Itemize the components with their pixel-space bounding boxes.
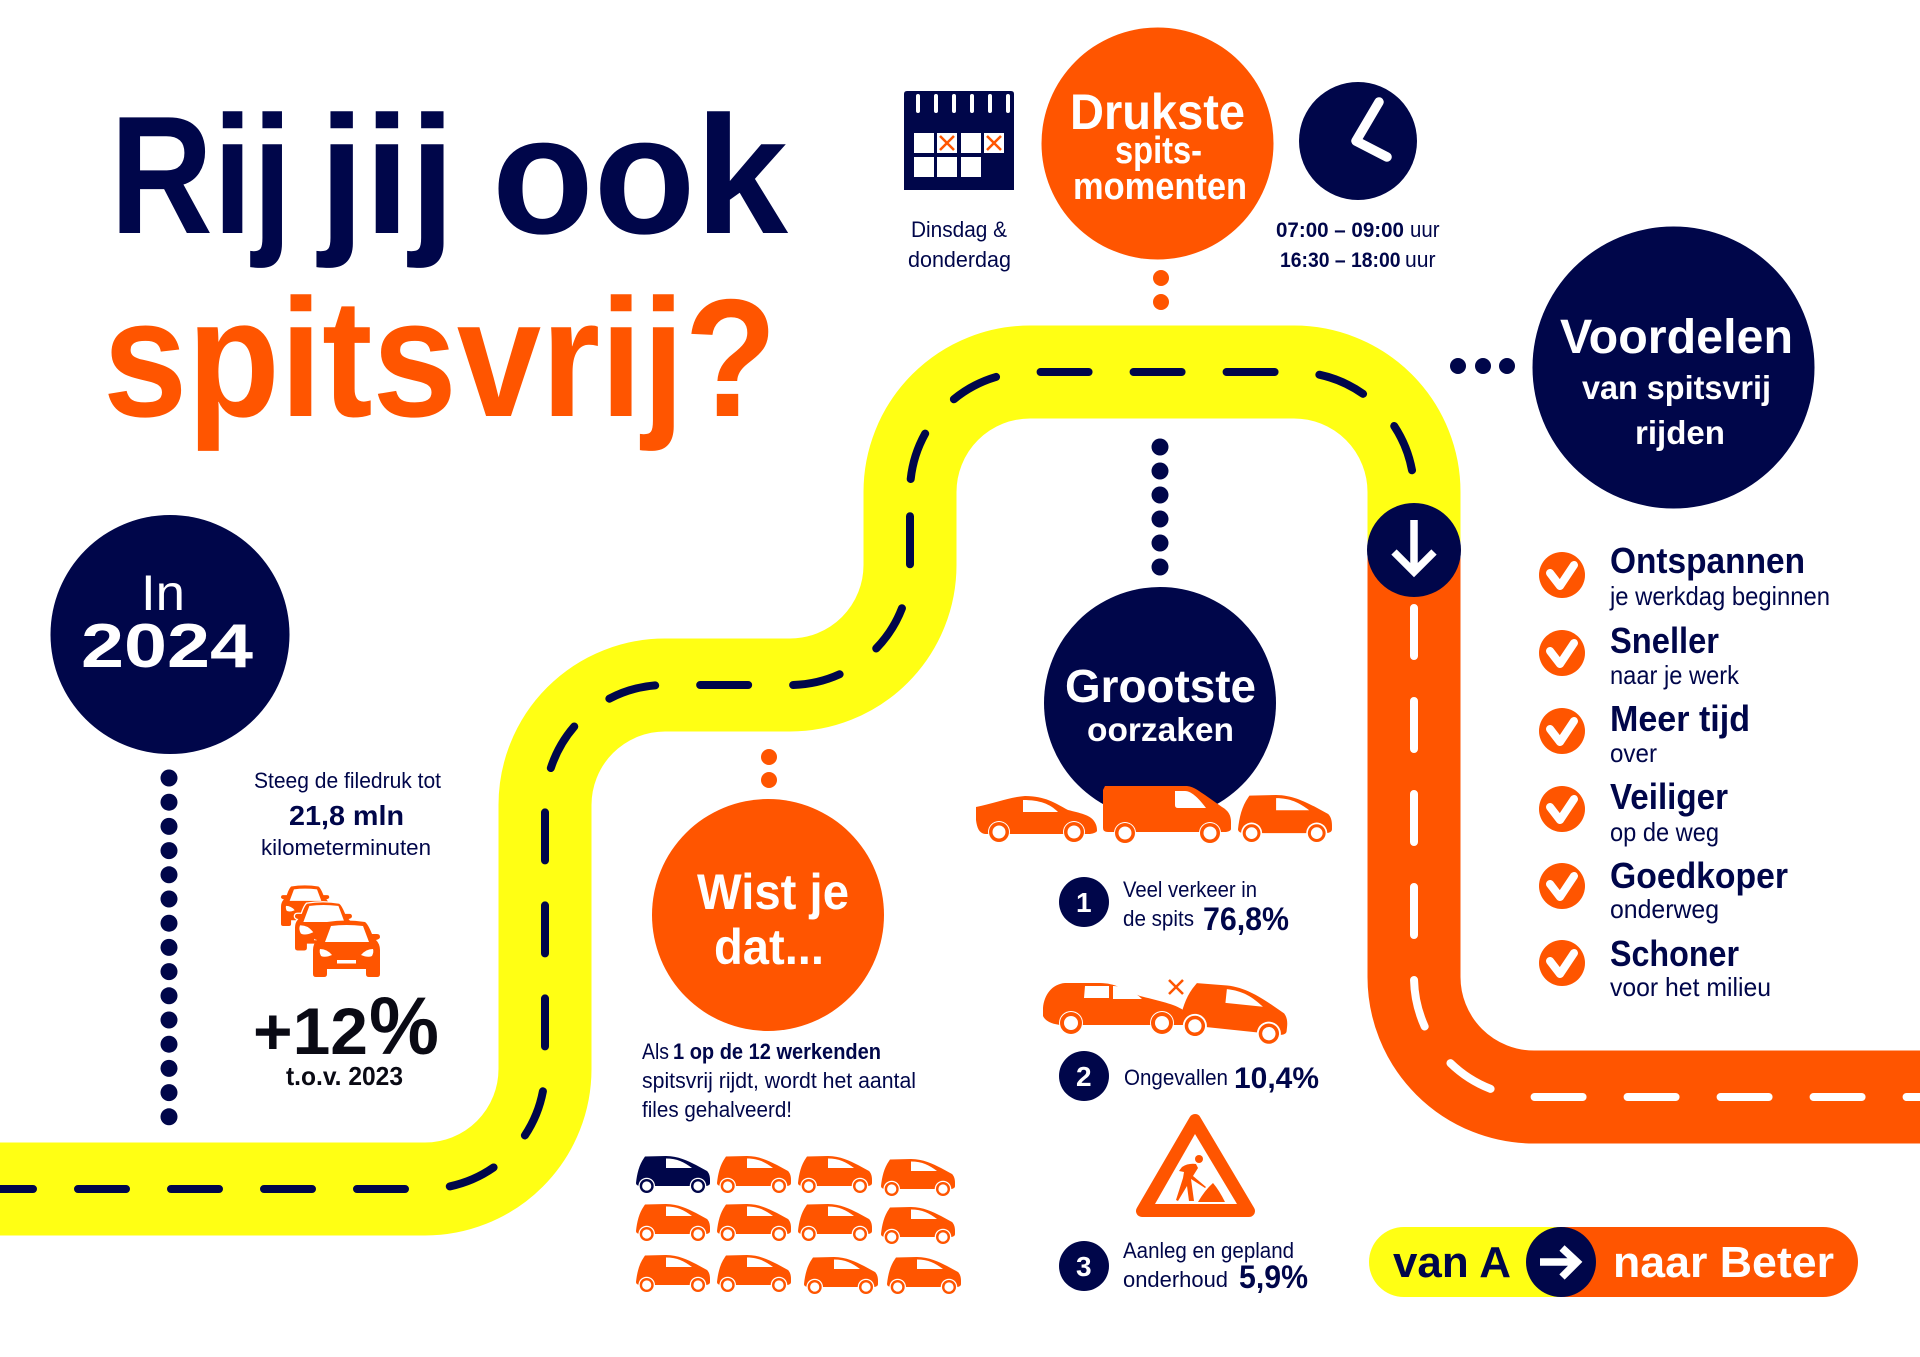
benefit: Meer tijd [1539,698,1750,768]
text: rush-hour times: 07:00 – 09:00 [1276,219,1404,242]
cause 2: Ongevallen [1124,1065,1228,1090]
cause 2: 2 [1076,1061,1092,1092]
benefit: Ontspannen: Ontspannen [1610,540,1805,581]
icon: twelve cars, one navy [636,1156,961,1295]
panel: Grootste oorzaken [976,438,1332,1295]
text: Wist je dat explanation: files gehalveerd! [642,1097,792,1122]
icon: clock [1299,82,1417,200]
dotted connector [1450,358,1515,374]
text: filedruk: 21,8 mln [289,800,404,831]
cause 3: onderhoud [1123,1267,1228,1292]
heading circle: Wist je dat: Wist je [697,864,849,920]
icon: cars and van in traffic [976,786,1332,844]
road: orange section [1414,550,1920,1097]
heading circle: Wist je dat: dat... [714,919,824,975]
icon: down arrow on road [1367,503,1461,597]
text: Wist je dat explanation: 1 op de 12 werkenden [673,1039,881,1064]
benefit: Goedkoper: onderweg [1610,894,1719,924]
text: filedruk [254,768,441,860]
benefit: Veiliger: op de weg [1610,817,1719,847]
cause 1: Veel verkeer in [1123,877,1257,902]
panel: In 2024 [50,515,441,1119]
title [103,81,789,452]
text: rush-hour times [1276,217,1440,272]
badge: van A naar Beter [1369,1227,1858,1297]
icon: road works sign [1142,1120,1249,1211]
benefit: Meer tijd: Meer tijd [1610,698,1750,739]
heading circle: In 2024: 2024 [81,612,254,681]
heading circle: Drukste spitsmomenten: spits- [1115,130,1202,172]
stat: +12%: t.o.v. 2023 [286,1061,403,1091]
cause 3: 3 [1076,1251,1092,1282]
cause 1 [1059,877,1289,937]
benefit: Goedkoper [1539,855,1788,924]
dotted connector [160,778,178,1119]
benefit: Veiliger: Veiliger [1610,776,1728,817]
benefit: Goedkoper: Goedkoper [1610,855,1788,896]
title: ook [492,81,789,269]
heading circle: Voordelen [1532,226,1814,508]
panel: Drukste spitsmomenten [904,28,1440,310]
cause 3: 5,9% [1239,1259,1308,1295]
text: Wist je dat explanation [642,1039,916,1122]
title: jij [316,81,455,269]
cause 2: 10,4% [1234,1062,1319,1095]
badge: van A naar Beter: van A [1393,1238,1511,1287]
heading circle: Drukste spitsmomenten: Drukste [1070,84,1245,140]
icon: traffic jam cars [281,885,380,977]
stat: +12% [253,981,439,1091]
heading circle: Drukste spitsmomenten [1042,28,1274,260]
cause 1: de spits [1123,906,1194,931]
benefit: Sneller: Sneller [1610,620,1719,661]
title: Rij [110,81,292,269]
stat: +12%: % [369,981,439,1072]
benefit: Veiliger [1539,776,1728,847]
heading circle: In 2024 [50,515,290,754]
benefit: Meer tijd: over [1610,738,1657,768]
dotted connector [761,749,777,788]
heading circle: Grootste oorzaken: oorzaken [1087,711,1234,748]
benefit: Ontspannen: je werkdag beginnen [1609,581,1830,611]
panel: Wist je dat [636,749,961,1295]
heading circle: Voordelen: rijden [1635,414,1725,451]
text: days: donderdag [908,247,1011,272]
text: Wist je dat explanation: spitsvrij rijdt, wordt het aantal [642,1068,916,1093]
text: filedruk: Steeg de filedruk tot [254,768,441,793]
panel: Voordelen [1450,226,1830,1002]
benefit: Ontspannen [1539,540,1830,611]
heading circle: Drukste spitsmomenten: momenten [1073,166,1247,208]
text: rush-hour times: uur [1405,247,1436,272]
dotted connector [1153,270,1169,310]
cause 1: 76,8% [1203,901,1289,937]
text: filedruk: kilometerminuten [261,835,431,860]
text: days [908,217,1011,272]
heading circle: Grootste oorzaken: Grootste [1065,660,1256,712]
heading circle: Voordelen: Voordelen [1560,311,1793,364]
title: spitsvrij? [103,264,777,452]
heading circle: In 2024: In [141,565,185,621]
badge: van A naar Beter: naar Beter [1613,1238,1834,1287]
heading circle: Grootste oorzaken [1044,587,1276,819]
cause 1: 1 [1076,887,1092,918]
cause 2 [1059,1051,1319,1101]
text: rush-hour times: uur [1410,217,1440,242]
cause 3 [1059,1238,1308,1295]
text: Wist je dat explanation: Als [642,1039,669,1064]
stat: +12%: +12 [253,994,368,1068]
heading circle: Voordelen: van spitsvrij [1582,369,1771,406]
cause 3: Aanleg en gepland [1123,1238,1294,1263]
icon: car crash [1043,980,1291,1047]
icon: calendar [904,91,1014,190]
benefit: Schoner [1539,933,1771,1002]
dotted connector [1152,438,1168,576]
text: days: Dinsdag & [911,217,1007,242]
text: rush-hour times: 16:30 – 18:00 [1280,249,1400,272]
benefit: Sneller [1539,620,1740,690]
benefit: Schoner: voor het milieu [1610,972,1771,1002]
benefit: Schoner: Schoner [1610,933,1739,974]
benefit: Sneller: naar je werk [1610,660,1740,690]
road: yellow section [0,372,1414,1189]
heading circle: Wist je dat [652,799,884,1031]
